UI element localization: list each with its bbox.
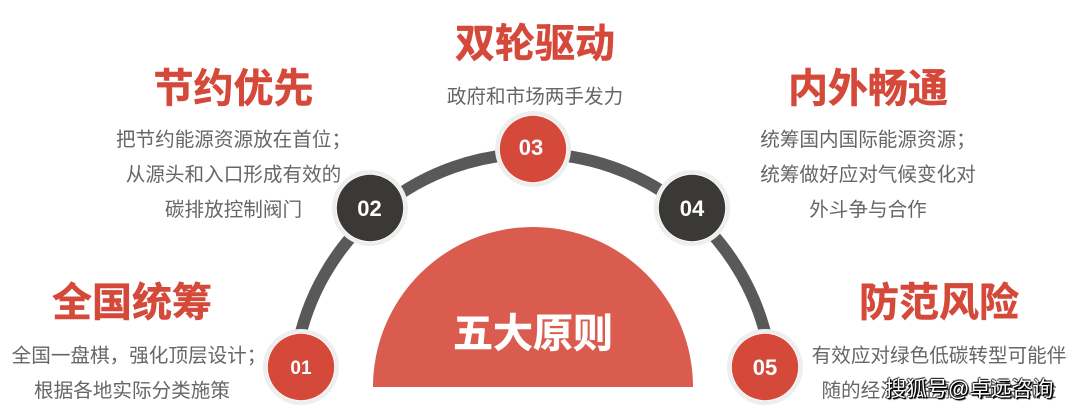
text block: 防范风险: 防范风险	[859, 281, 1019, 325]
text block: 节约优先: 把节约能源资源放在首位；	[116, 129, 351, 151]
text block: 内外畅通: 外斗争与合作	[809, 199, 927, 221]
central semicircle: 五大原则	[453, 312, 613, 356]
text block: 全国统筹: 全国统筹	[52, 281, 212, 325]
central semicircle	[373, 227, 693, 387]
text block: 内外畅通: 内外畅通	[788, 67, 948, 111]
text block: 防范风险	[812, 281, 1066, 402]
text block: 全国统筹: 全国一盘棋，强化顶层设计；	[12, 344, 266, 366]
text block: 节约优先: 碳排放控制阀门	[165, 199, 302, 221]
node 04	[654, 170, 730, 246]
text block: 双轮驱动	[447, 22, 623, 108]
text block: 双轮驱动: 双轮驱动	[455, 22, 615, 66]
node 05: 05	[753, 355, 777, 380]
text block: 全国统筹: 根据各地实际分类施策	[34, 380, 230, 402]
arc connector	[297, 154, 769, 350]
node 02: 02	[357, 196, 382, 221]
text block: 节约优先: 从源头和入口形成有效的	[126, 164, 341, 186]
text block: 防范风险: 随的经济、金融、社会风险	[821, 380, 1057, 402]
text block: 内外畅通: 统筹做好应对气候变化对	[760, 164, 976, 186]
node 05	[727, 329, 803, 405]
node 01	[263, 329, 339, 405]
text block: 节约优先	[116, 67, 351, 221]
node 04: 04	[680, 196, 705, 221]
text block: 双轮驱动: 政府和市场两手发力	[447, 86, 623, 108]
node 02	[332, 170, 408, 246]
text block: 防范风险: 有效应对绿色低碳转型可能伴	[812, 344, 1066, 366]
text block: 节约优先: 节约优先	[154, 67, 314, 111]
text block: 内外畅通: 统筹国内国际能源资源；	[760, 129, 976, 151]
node 03	[495, 111, 571, 187]
node 01: 01	[290, 358, 312, 379]
watermark: 搜狐号@卓远咨询	[885, 378, 1053, 401]
text block: 全国统筹	[12, 281, 266, 402]
text block: 内外畅通	[760, 67, 976, 221]
node 03: 03	[519, 135, 543, 160]
